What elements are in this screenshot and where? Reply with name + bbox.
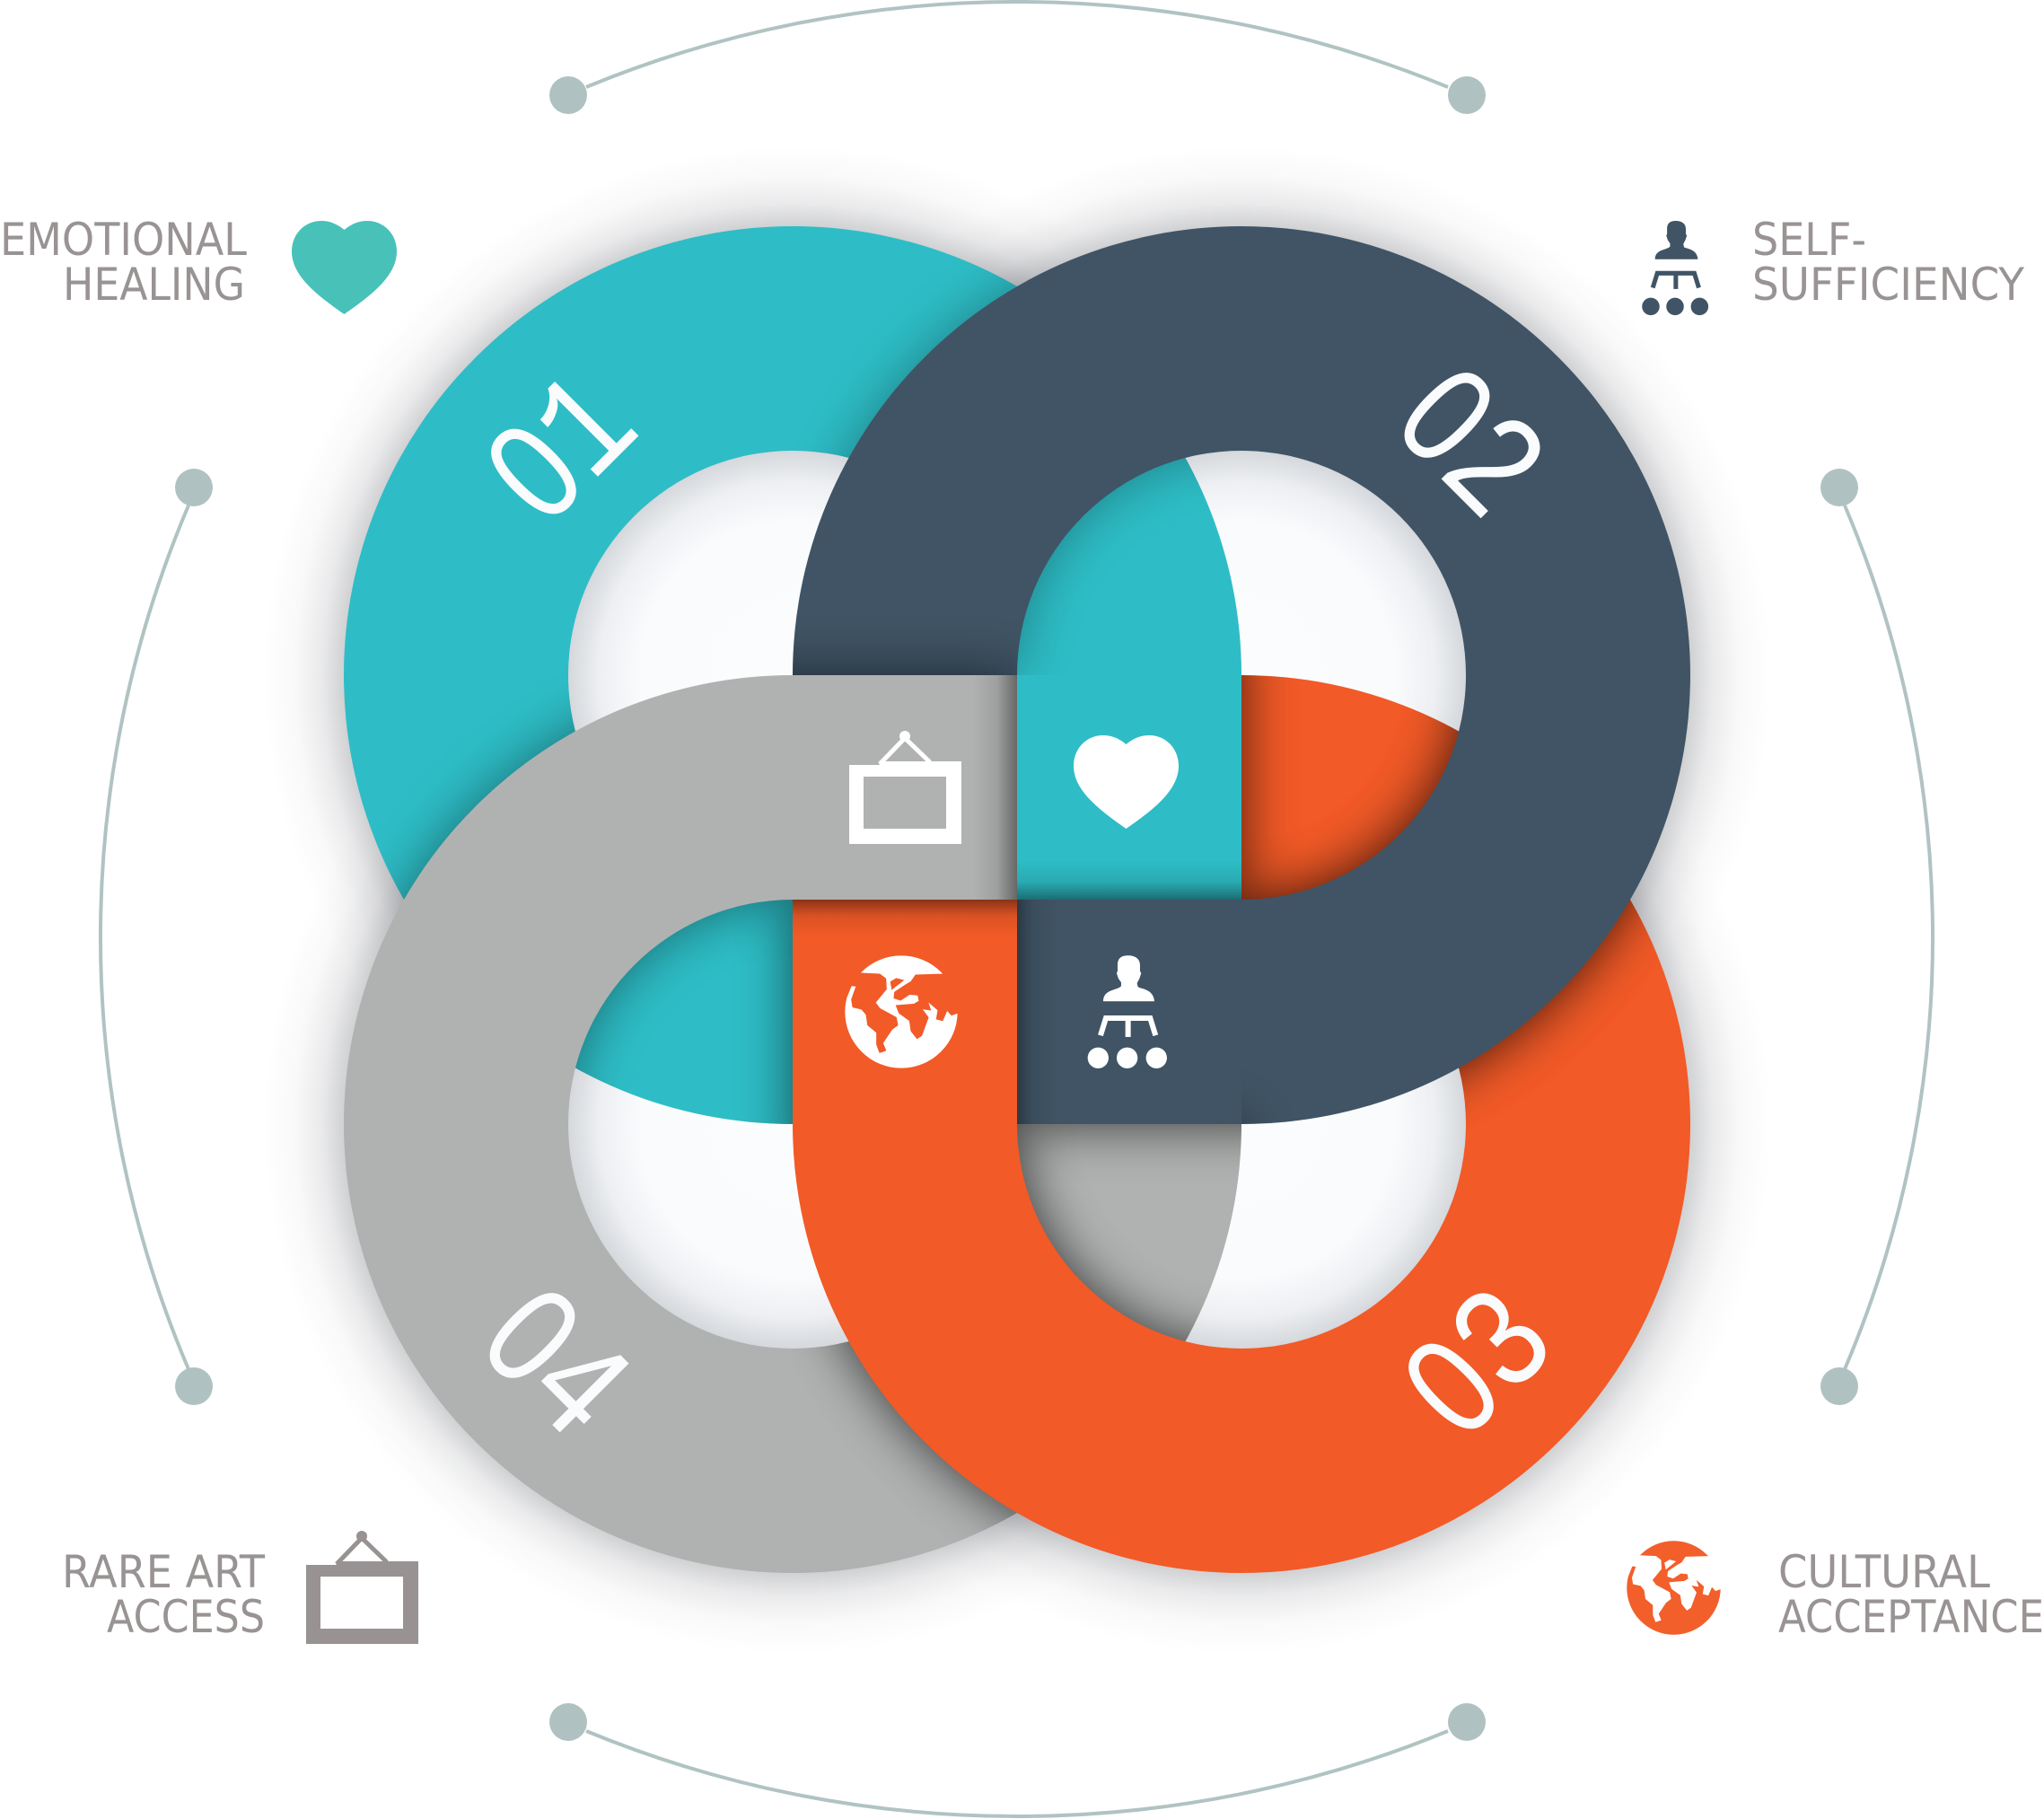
center square: dark: [1017, 900, 1241, 1124]
legend: cultural acceptance: [1623, 1541, 2044, 1643]
label: rare art access: RARE ART: [62, 1546, 265, 1598]
icon: picture frame white: [849, 731, 961, 844]
label: self-sufficiency: [1752, 214, 2024, 311]
legend: self-sufficiency: [1642, 214, 2024, 315]
label: self-sufficiency: SELF-: [1752, 214, 1866, 266]
ring 02 dark: [793, 226, 1690, 1124]
icon: person with network white: [1088, 955, 1167, 1068]
label: cultural acceptance: [1778, 1546, 2044, 1643]
icon: heart teal: [292, 221, 397, 314]
ring 03 orange: [793, 675, 1690, 1573]
icon: globe orange: [1623, 1541, 1727, 1635]
label: emotional healing: [0, 214, 247, 311]
label: emotional healing: HEALING: [63, 259, 245, 311]
arc: left connector: [101, 469, 213, 1405]
label: rare art access: [62, 1546, 265, 1643]
ring 04 gray: [344, 675, 1241, 1573]
center square: teal: [1017, 675, 1241, 900]
outer soft shadow: [263, 145, 1771, 1654]
legend: rare art access: [62, 1531, 418, 1644]
ring holes: [567, 450, 1467, 1349]
icon: globe white: [841, 955, 965, 1068]
arc: bottom connector: [549, 1703, 1486, 1816]
number 03: 03: [1372, 1255, 1592, 1476]
label: rare art access: ACCESS: [107, 1591, 265, 1643]
arc: right connector: [1820, 469, 1933, 1405]
legend: emotional healing: [0, 214, 397, 314]
center square: gray: [793, 675, 1017, 900]
number 04: 04: [443, 1256, 663, 1477]
panel: interlocked rings diagram: [263, 145, 1771, 1654]
number 01: 01: [454, 340, 675, 561]
label: self-sufficiency: SUFFICIENCY: [1752, 259, 2024, 311]
label: cultural acceptance: CULTURAL: [1778, 1546, 1990, 1598]
icon: heart white: [1074, 735, 1179, 829]
center square: orange: [793, 900, 1017, 1124]
number 02: 02: [1357, 336, 1578, 557]
label: emotional healing: EMOTIONAL: [0, 214, 247, 266]
ring 01 teal: [344, 226, 1241, 1124]
icon: person with network dark: [1642, 221, 1708, 315]
icon: picture frame gray: [306, 1531, 418, 1644]
arc: top connector: [549, 2, 1486, 114]
